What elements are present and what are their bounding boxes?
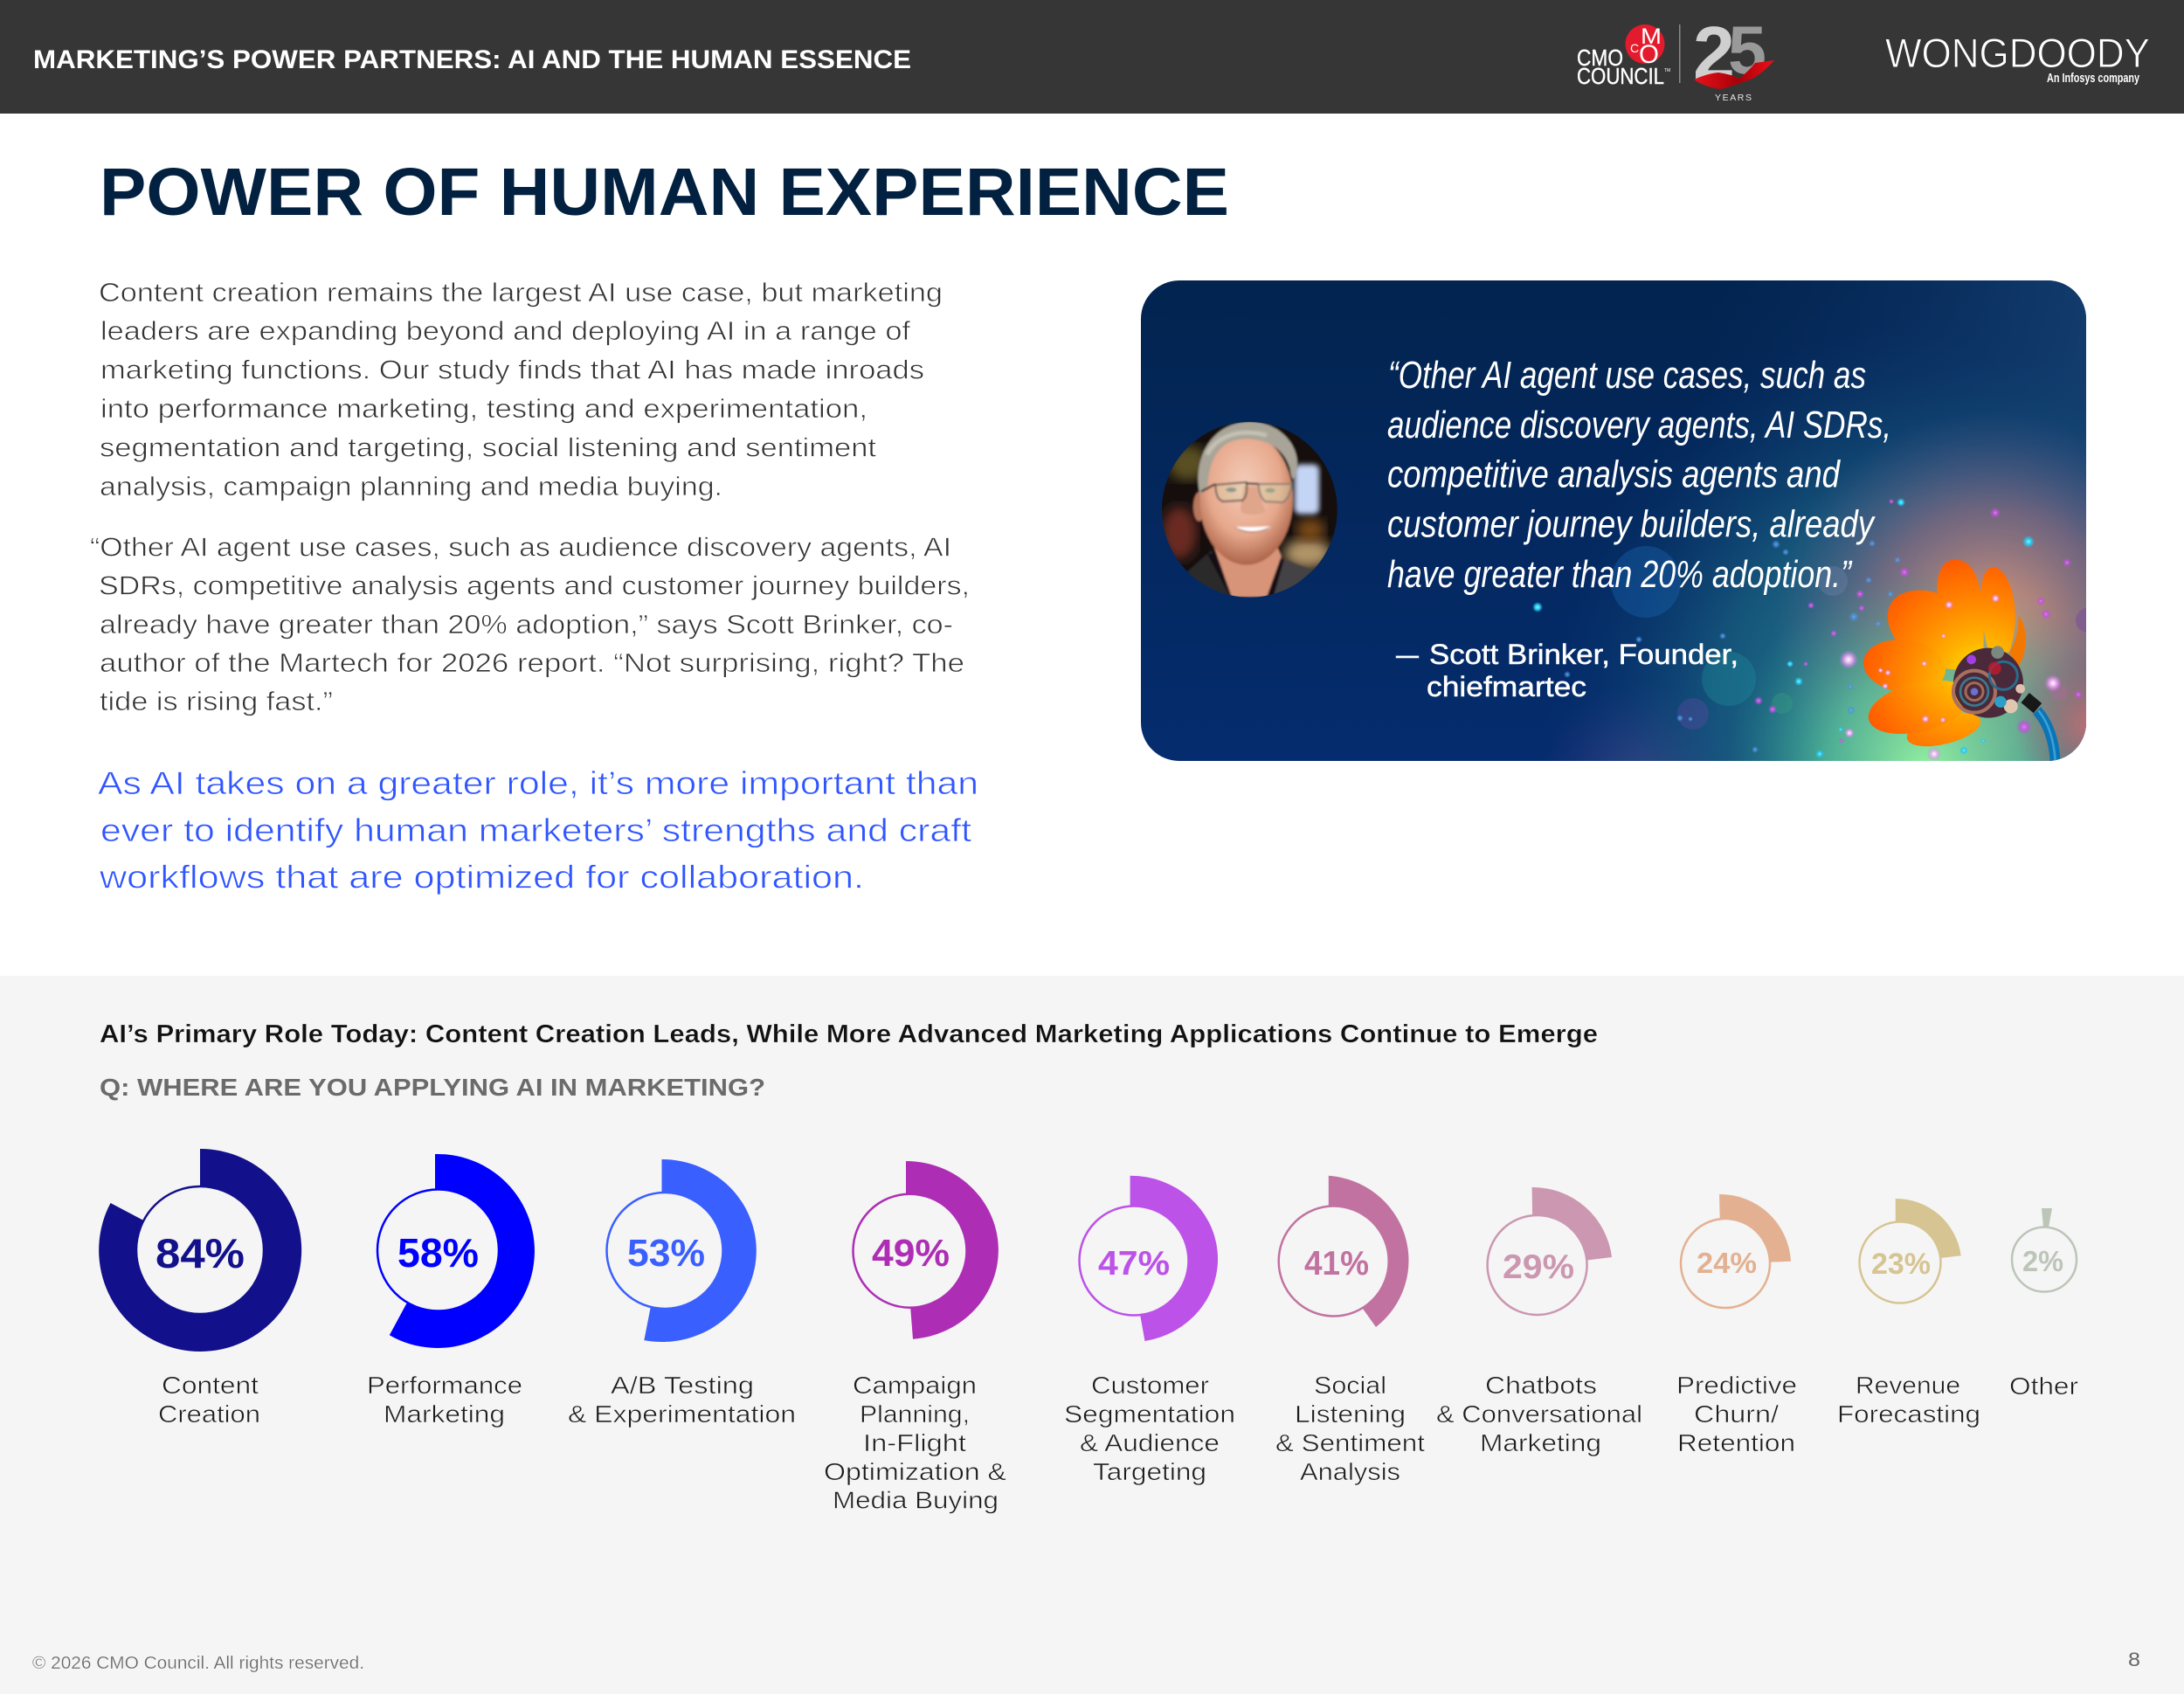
label: A/B Testing: A/B Testing xyxy=(611,1372,754,1399)
panel: quote card xyxy=(1141,280,2100,761)
donut: Customer Segmentation 47% xyxy=(1080,1176,1218,1341)
label: Campaign Planning: Optimization & xyxy=(824,1458,1006,1485)
header title: MARKETING’S POWER PARTNERS: AI AND THE HUMAN ESSENCE xyxy=(33,45,911,74)
header bar xyxy=(0,0,2184,114)
label: Social Listening: & Sentiment xyxy=(1275,1429,1425,1456)
label: Customer Segmentation: Customer xyxy=(1091,1372,1209,1399)
text block: Brinker quote paragraph xyxy=(90,531,970,716)
portrait photo xyxy=(1159,419,1343,603)
logo: WongDoody: An Infosys company xyxy=(2047,72,2139,86)
label: A/B Testing xyxy=(568,1372,796,1428)
donut: Performance Marketing 58%: 58% xyxy=(397,1230,479,1276)
text block: Brinker quote paragraph: author of the Martech for 2026 report. “Not surprising, right? The xyxy=(100,647,964,678)
quote attribution: chiefmartec xyxy=(1427,671,1586,702)
donut: A/B Testing 53%: 53% xyxy=(627,1232,705,1275)
label: Predictive Churn xyxy=(1676,1372,1797,1456)
donut: Performance Marketing 58% xyxy=(377,1154,535,1348)
footer copyright: © 2026 CMO Council. All rights reserved. xyxy=(32,1654,364,1673)
label: Revenue Forecasting xyxy=(1837,1372,1980,1428)
label: Revenue Forecasting: Forecasting xyxy=(1837,1400,1980,1428)
bokeh bubbles xyxy=(1611,546,2100,729)
text block: intro paragraph: Content creation remains the largest AI use case, but marketing xyxy=(99,277,943,308)
label: A/B Testing: & Experimentation xyxy=(568,1400,796,1428)
donut: Chatbots 29%: 29% xyxy=(1503,1248,1574,1286)
label: Performance Marketing: Performance xyxy=(367,1372,522,1399)
donut: Customer Segmentation 47%: 47% xyxy=(1098,1245,1170,1283)
label: Social Listening xyxy=(1275,1372,1425,1485)
quote text: have greater than 20% adoption.” xyxy=(1387,553,1853,596)
label: Content Creation: Content xyxy=(162,1372,259,1399)
label: Content Creation: Creation xyxy=(158,1400,260,1428)
donut: Content Creation 84% xyxy=(99,1149,301,1352)
label: Chatbots xyxy=(1436,1372,1642,1456)
label: Customer Segmentation: & Audience xyxy=(1080,1429,1220,1456)
text block: intro paragraph: segmentation and targeting, social listening and sentiment xyxy=(100,432,876,463)
chart heading: AI’s Primary Role Today: Content Creation Leads, While More Advanced Marketing Applications Continue to Emerge xyxy=(100,1020,1598,1048)
logo: CMO Council 25 years: 2 xyxy=(1693,12,1735,95)
quote text: customer journey builders, already xyxy=(1387,503,1876,545)
donut: Campaign Planning 49% xyxy=(853,1161,999,1339)
text block: blue callout: As AI takes on a greater role, it’s more important than xyxy=(98,765,978,801)
label: Content Creation xyxy=(158,1372,260,1428)
logo: CMO Council 25 years: O xyxy=(1639,40,1659,69)
donut: Other 2%: 2% xyxy=(2022,1245,2063,1277)
logo: CMO Council 25 years: COUNCIL xyxy=(1577,63,1664,89)
label: Campaign Planning xyxy=(824,1372,1006,1513)
label: Predictive Churn: Retention xyxy=(1677,1429,1795,1456)
donut: A/B Testing 53% xyxy=(606,1159,757,1342)
label: Campaign Planning: In-Flight xyxy=(863,1429,966,1456)
donut: Social Listening 41%: 41% xyxy=(1304,1245,1369,1283)
logo: CMO Council 25 years: 5 xyxy=(1728,11,1766,88)
logo: CMO Council 25 years: C xyxy=(1630,41,1639,55)
donut: Revenue Forecasting 23%: 23% xyxy=(1871,1248,1931,1281)
label: Social Listening: Listening xyxy=(1295,1400,1406,1428)
text block: Brinker quote paragraph: tide is rising fast.” xyxy=(100,686,333,716)
label: Performance Marketing: Marketing xyxy=(384,1400,505,1428)
quote text xyxy=(1387,354,1891,596)
label: Performance Marketing xyxy=(367,1372,522,1428)
quote text: competitive analysis agents and xyxy=(1387,453,1841,496)
label: Campaign Planning: Media Buying xyxy=(833,1487,999,1513)
quote attribution: — xyxy=(1396,639,1419,670)
text block: blue callout: ever to identify human marketers’ strengths and craft xyxy=(100,812,972,848)
text block: Brinker quote paragraph: SDRs, competitive analysis agents and customer journey builders, xyxy=(99,570,970,601)
text block: blue callout xyxy=(98,765,978,895)
donut: Revenue Forecasting 23% xyxy=(1859,1199,1961,1303)
donut: Chatbots 29% xyxy=(1488,1187,1612,1315)
donut: Content Creation 84%: 84% xyxy=(156,1230,245,1276)
panel: survey chart section xyxy=(0,976,2184,1694)
label: Social Listening: Analysis xyxy=(1300,1458,1400,1485)
logo: CMO Council 25 years: M xyxy=(1641,24,1662,49)
logo: WongDoody: WONGDOODY xyxy=(1885,30,2150,76)
label: Customer Segmentation: Segmentation xyxy=(1064,1400,1235,1428)
logo: CMO Council 25 years: CMO xyxy=(1577,45,1623,71)
label: Predictive Churn: Churn/ xyxy=(1694,1400,1779,1428)
text block: intro paragraph: leaders are expanding beyond and deploying AI in a range of xyxy=(100,315,910,346)
text block: intro paragraph: analysis, campaign planning and media buying. xyxy=(100,471,722,501)
donut: Predictive Churn 24% xyxy=(1681,1194,1791,1308)
label: Customer Segmentation xyxy=(1064,1372,1235,1485)
text block: intro paragraph xyxy=(99,277,943,501)
label: Predictive Churn: Predictive xyxy=(1676,1372,1797,1399)
logo: CMO Council 25 years: YEARS xyxy=(1715,93,1752,103)
sparkle particles xyxy=(1532,498,2083,761)
text block: intro paragraph: into performance marketing, testing and experimentation, xyxy=(100,393,867,424)
text block: Brinker quote paragraph: already have greater than 20% adoption,” says Scott Brinker, co- xyxy=(100,609,953,640)
text block: Brinker quote paragraph: “Other AI agent use cases, such as audience discovery agents, AI xyxy=(90,531,951,563)
quote text: audience discovery agents, AI SDRs, xyxy=(1387,404,1891,446)
label: Other: Other xyxy=(2009,1372,2078,1400)
donut: Social Listening 41% xyxy=(1279,1176,1409,1327)
label: Chatbots: & Conversational xyxy=(1436,1400,1642,1428)
label: Customer Segmentation: Targeting xyxy=(1093,1458,1206,1485)
label: Campaign Planning: Planning, xyxy=(860,1400,970,1428)
donut: Campaign Planning 49%: 49% xyxy=(872,1232,950,1275)
donut: Predictive Churn 24%: 24% xyxy=(1697,1247,1757,1279)
quote text: “Other AI agent use cases, such as xyxy=(1388,354,1866,397)
donut: Other 2% xyxy=(2012,1208,2077,1292)
label: Revenue Forecasting: Revenue xyxy=(1856,1372,1960,1399)
label: Chatbots: Marketing xyxy=(1480,1429,1601,1456)
text block: blue callout: workflows that are optimized for collaboration. xyxy=(99,860,864,895)
label: Campaign Planning: Campaign xyxy=(853,1372,977,1399)
page number: 8 xyxy=(2128,1649,2140,1670)
title: POWER OF HUMAN EXPERIENCE xyxy=(100,155,1229,230)
quote attribution xyxy=(1396,643,1737,697)
label: Chatbots: Chatbots xyxy=(1485,1372,1597,1399)
logo: CMO Council 25 years: TM xyxy=(1664,68,1670,73)
chart question: Q: WHERE ARE YOU APPLYING AI IN MARKETING? xyxy=(100,1074,765,1101)
logo: CMO Council 25 years xyxy=(1577,11,1774,103)
icon: flower illustration xyxy=(1860,560,2056,761)
text block: intro paragraph: marketing functions. Our study finds that AI has made inroads xyxy=(100,355,924,384)
quote attribution: Scott Brinker, Founder, xyxy=(1429,639,1738,670)
label: Social Listening: Social xyxy=(1314,1372,1386,1399)
